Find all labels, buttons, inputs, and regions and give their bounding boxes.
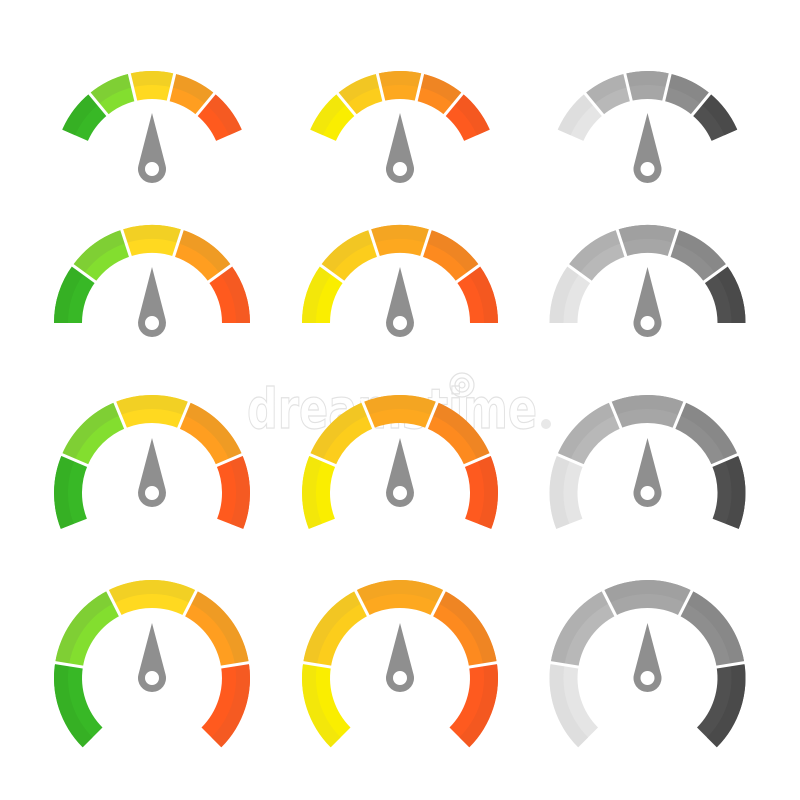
segment: orange — [427, 402, 490, 466]
segment: mid grey — [625, 71, 670, 101]
needle — [634, 623, 662, 692]
gauge: row 1 greyscale — [558, 70, 737, 183]
segment: charcoal — [692, 94, 737, 141]
segment: green — [62, 94, 107, 141]
needle — [386, 113, 414, 183]
segment: lightest grey — [550, 265, 591, 323]
segment: mid grey — [610, 395, 685, 428]
segment: lime — [62, 402, 125, 466]
segment: amber — [377, 71, 423, 101]
segment: yellow — [302, 663, 350, 747]
needle — [138, 267, 166, 337]
segment: dark grey — [674, 402, 738, 466]
watermark: dreamstime — [247, 377, 537, 441]
segment: dark grey — [664, 74, 710, 115]
segment: gold — [321, 230, 378, 282]
needle — [634, 267, 662, 337]
segment: green — [54, 663, 102, 747]
segment: orange — [174, 230, 231, 282]
needle — [138, 438, 166, 507]
segment: lightest grey — [549, 663, 598, 747]
segment: amber — [356, 580, 444, 616]
segment: light grey — [568, 230, 626, 282]
segment: orange — [432, 591, 497, 667]
gauge: row 4 colour yellow to red — [299, 580, 501, 747]
segment: lime — [55, 591, 120, 667]
needle — [634, 438, 662, 507]
segment: red — [445, 94, 490, 141]
segment: dark grey — [679, 591, 744, 667]
segment: lightest grey — [558, 94, 603, 141]
segment: orange — [168, 74, 214, 115]
gauge: row 3 colour green to red — [54, 395, 250, 529]
segment: red — [464, 455, 498, 529]
segment: gold — [310, 402, 373, 466]
gauge: row 4 greyscale — [547, 580, 748, 747]
segment: orange — [184, 591, 249, 667]
segment: orange — [416, 74, 462, 115]
segment: light grey — [585, 74, 631, 115]
segment: yellow — [310, 94, 355, 141]
segment: lightest grey — [550, 455, 583, 529]
segment: red — [216, 455, 250, 529]
segment: yellow — [129, 71, 175, 101]
segment: lime — [73, 230, 130, 282]
segment: mid grey — [617, 225, 678, 256]
needle — [386, 438, 414, 507]
needle — [138, 623, 166, 692]
segment: green — [54, 265, 95, 323]
segment: yellow — [108, 580, 196, 616]
needle — [386, 267, 414, 337]
segment: yellow — [115, 395, 189, 428]
segment: green — [54, 455, 88, 529]
segment: gold — [303, 591, 368, 667]
segment: mid grey — [603, 580, 692, 616]
segment: light grey — [557, 402, 621, 466]
gauge: row 2 colour green to red — [54, 225, 250, 337]
segment: lime — [90, 74, 136, 115]
gauge: row 3 greyscale — [550, 395, 745, 529]
needle — [386, 623, 414, 692]
segment: red — [209, 265, 250, 323]
segment: red — [202, 663, 250, 747]
gauge: row 3 colour yellow to red — [302, 395, 498, 529]
needle — [138, 113, 166, 183]
gauge: row 2 colour yellow to red — [302, 225, 498, 337]
segment: charcoal — [712, 455, 745, 529]
segment: charcoal — [704, 265, 746, 323]
gauge: row 1 colour green to red — [62, 70, 242, 183]
segment: dark grey — [669, 230, 727, 282]
gauge: row 4 colour green to red — [51, 580, 253, 747]
segment: charcoal — [697, 663, 746, 747]
segment: orange — [422, 230, 479, 282]
segment: red — [450, 663, 498, 747]
gauge: row 2 greyscale — [550, 225, 746, 337]
segment: yellow — [302, 455, 336, 529]
segment: yellow — [122, 225, 182, 256]
segment: red — [457, 265, 498, 323]
segment: orange — [179, 402, 242, 466]
segment: gold — [338, 74, 384, 115]
segment: amber — [370, 225, 430, 256]
gauge: row 1 colour yellow to red — [310, 70, 490, 183]
segment: red — [197, 94, 242, 141]
segment: yellow — [302, 265, 343, 323]
segment: light grey — [551, 591, 616, 667]
segment: amber — [363, 395, 437, 428]
needle — [634, 113, 662, 183]
